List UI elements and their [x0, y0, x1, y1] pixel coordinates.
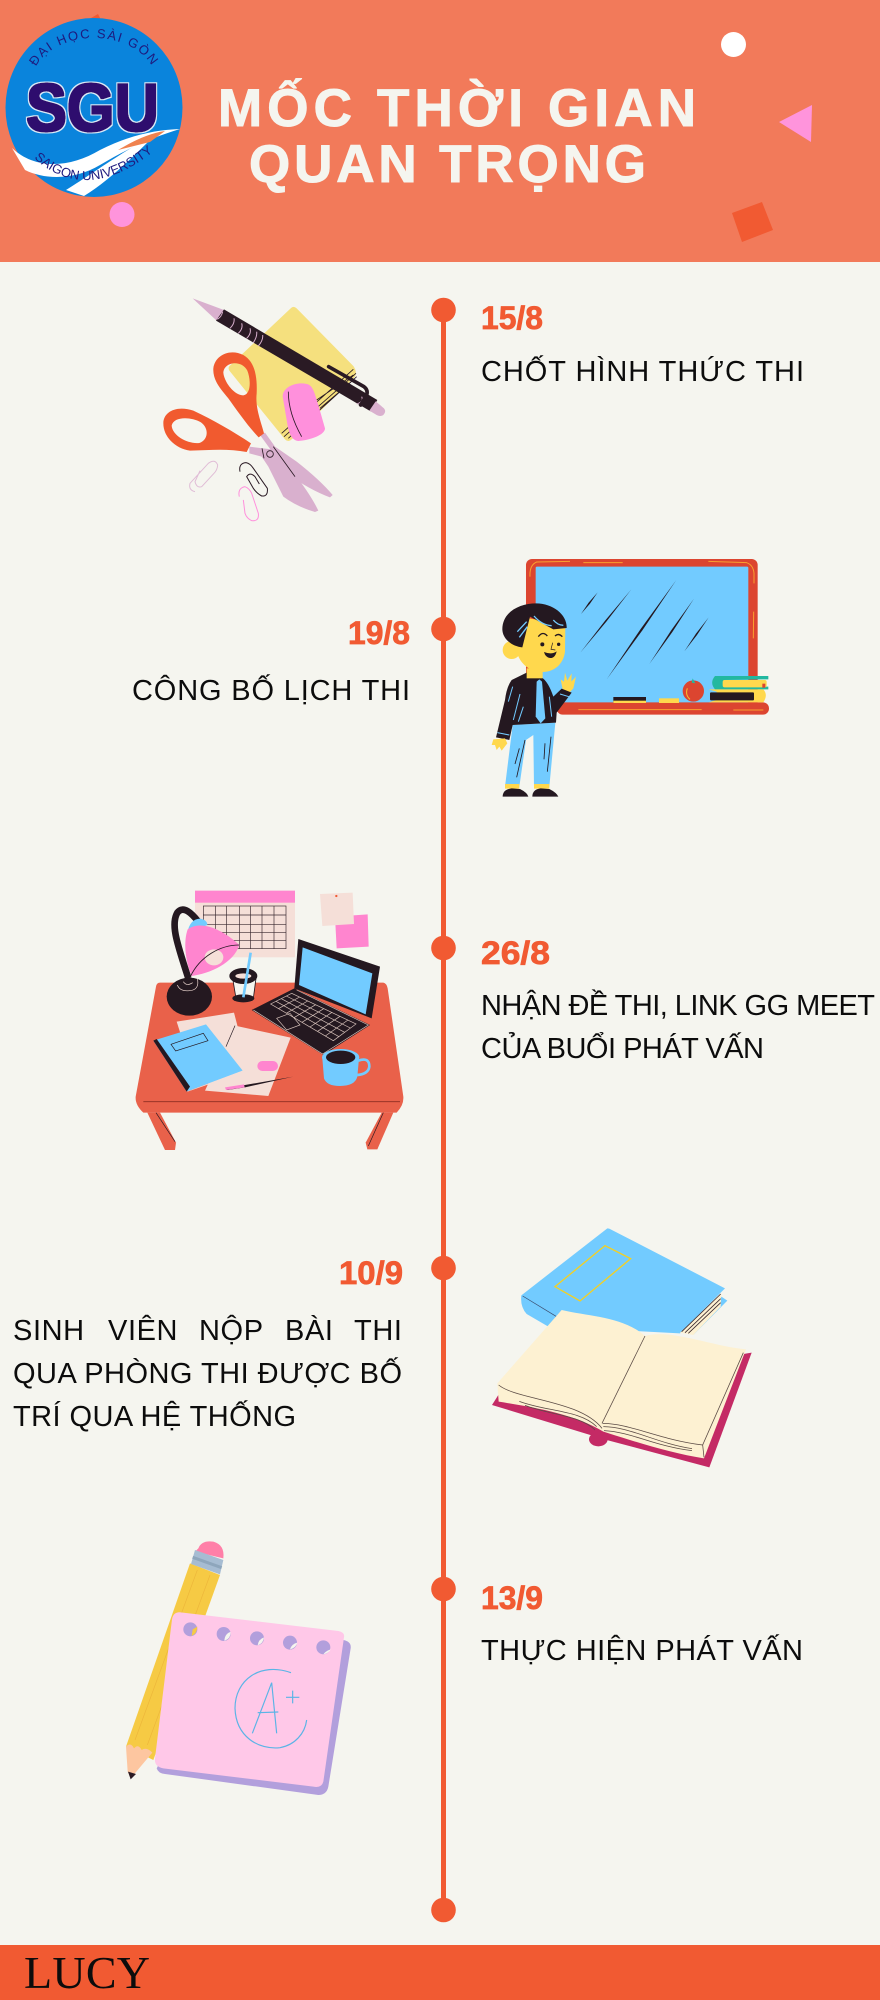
title: MỐC THỜI GIAN	[218, 78, 696, 138]
decoration: pink circle	[110, 202, 134, 227]
milestone 26/8: 26/8	[481, 935, 550, 971]
illustration: pencil and graded notepad	[126, 1541, 351, 1795]
milestone 10/9: QUA PHÒNG THI ĐƯỢC BỐ	[13, 1356, 402, 1390]
decoration: small orange triangle	[84, 14, 104, 26]
milestone 10/9: VIÊN	[108, 1314, 178, 1347]
illustration: desk with laptop and lamp	[136, 891, 403, 1150]
milestone 19/8: 19/8	[348, 615, 410, 651]
decoration: white circle	[721, 32, 746, 57]
illustration: stacked books	[492, 1228, 752, 1467]
teacher figure	[492, 603, 576, 797]
title: QUAN TRỌNG	[249, 135, 646, 194]
milestone 13/9: THỰC HIỆN PHÁT VẤN	[481, 1633, 803, 1667]
milestone 10/9: TRÍ QUA HỆ THỐNG	[13, 1399, 296, 1433]
timeline axis	[431, 298, 456, 1922]
milestone 13/9	[481, 1580, 803, 1667]
illustration: teacher at blackboard	[492, 559, 769, 797]
logo: SGU Saigon University: SGU	[26, 70, 159, 146]
milestone 15/8	[481, 300, 804, 388]
milestone 13/9: 13/9	[481, 1580, 543, 1616]
milestone 26/8: CỦA BUỔI PHÁT VẤN	[481, 1031, 764, 1065]
title	[218, 78, 696, 194]
milestone 10/9	[13, 1255, 403, 1433]
milestone 19/8: CÔNG BỐ LỊCH THI	[132, 673, 410, 707]
milestone 10/9: NỘP	[199, 1313, 264, 1347]
logo: SGU Saigon University: ĐẠI HỌC SÀI GÒN	[29, 28, 158, 66]
milestone 26/8: NHẬN ĐỀ THI, LINK GG MEET	[481, 988, 875, 1022]
footer	[0, 1945, 880, 2000]
logo: SGU Saigon University	[6, 18, 182, 197]
decoration: orange square	[732, 202, 773, 242]
footer: LUCY	[24, 1947, 150, 1998]
milestone 10/9: SINH	[13, 1315, 85, 1347]
milestone 10/9: BÀI	[285, 1314, 334, 1347]
illustration: scissors, pen and stationery	[163, 298, 385, 521]
header banner	[0, 0, 880, 262]
milestone 19/8	[132, 615, 410, 707]
milestone 10/9: THI	[354, 1315, 403, 1347]
milestone 15/8: 15/8	[481, 300, 543, 336]
milestone 10/9: 10/9	[339, 1255, 403, 1291]
decoration: pink triangle	[779, 105, 812, 142]
logo: SGU Saigon University: SAIGON UNIVERSITY	[36, 145, 150, 180]
milestone 15/8: CHỐT HÌNH THỨC THI	[481, 354, 804, 388]
milestone 26/8	[481, 935, 875, 1065]
